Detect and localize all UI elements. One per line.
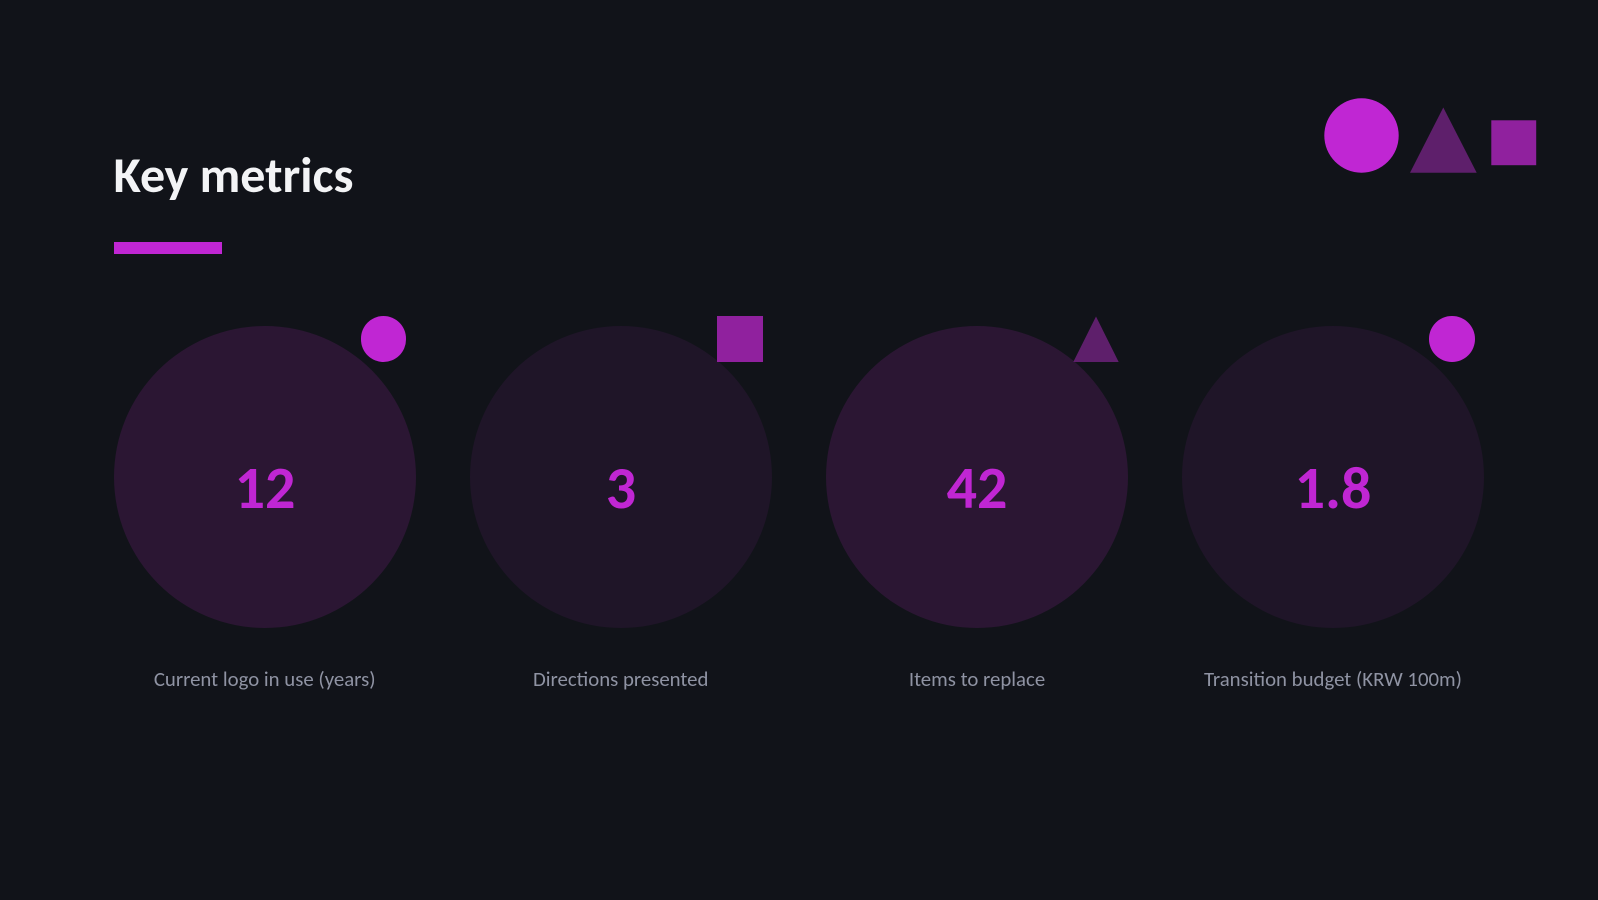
value 1.8: 1.8: [1295, 452, 1371, 525]
metric 3: items to replace: [826, 316, 1128, 692]
value 12: 12: [235, 452, 295, 525]
title accent bar: [114, 242, 222, 254]
value 3: 3: [606, 452, 636, 525]
metric circle 1: [114, 326, 416, 628]
label: Items to replace: [909, 666, 1045, 692]
icon: triangle: [1074, 316, 1119, 362]
metric 4: transition budget: [1182, 316, 1484, 692]
decorative shapes: circle, triangle, square: [1324, 98, 1536, 173]
value 42: 42: [947, 452, 1007, 525]
icon: circle: [1429, 316, 1475, 362]
label: Transition budget (KRW 100m): [1204, 666, 1462, 692]
metric 1: current logo in use: [114, 316, 416, 692]
metric circle 3: [826, 326, 1128, 628]
icon: circle: [361, 316, 406, 362]
metric 2: directions presented: [470, 316, 772, 692]
title: Key metrics: [114, 145, 353, 206]
label: Directions presented: [533, 666, 708, 692]
label: Current logo in use (years): [154, 666, 376, 692]
icon: square: [717, 316, 762, 362]
metric circle 4: [1182, 326, 1484, 628]
metric circle 2: [470, 326, 772, 628]
